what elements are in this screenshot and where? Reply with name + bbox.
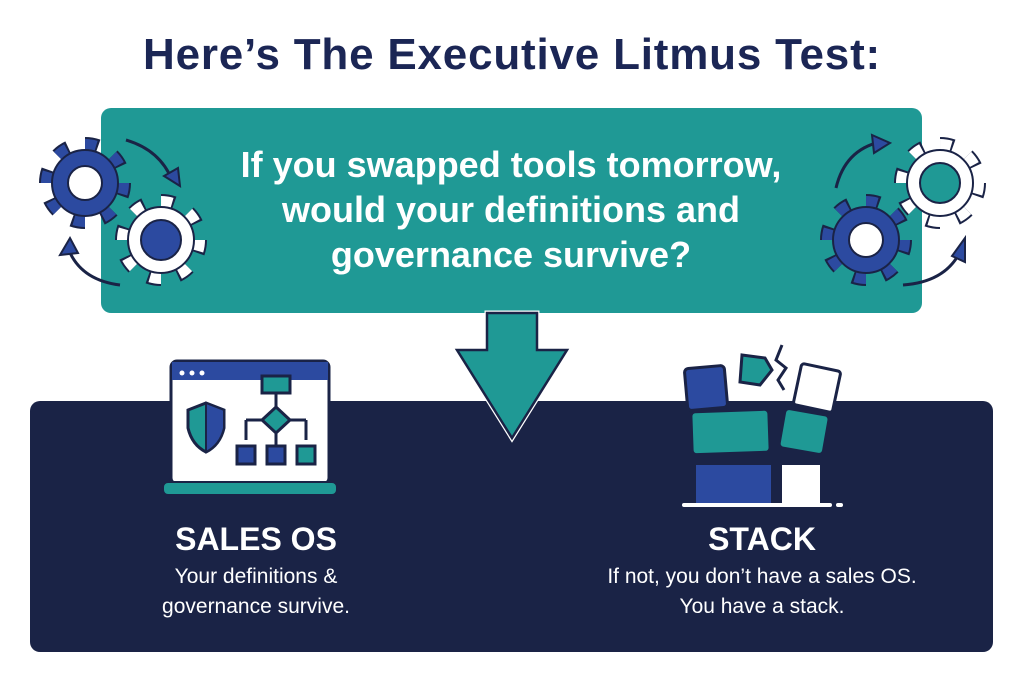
question text: would your definitions and [282,189,740,230]
question text: If you swapped tools tomorrow, [241,144,781,185]
question text [241,144,781,275]
text block: stack [607,521,917,618]
arrow: down [454,310,570,443]
text block: stack: You have a stack. [679,595,844,618]
text block: stack: If not, you don’t have a sales OS. [607,565,917,588]
text block: stack: STACK [708,521,816,557]
icon: broken stack [682,344,843,507]
icon: gears right [820,134,986,286]
title: Here’s The Executive Litmus Test: [143,30,881,79]
text block: sales os [162,521,350,618]
text block: sales os: governance survive. [162,595,350,618]
icon: gears left [39,137,207,286]
icon: laptop [164,360,336,494]
question panel [101,108,922,313]
text block: sales os: Your definitions & [175,565,337,588]
text block: sales os: SALES OS [175,521,337,557]
question text: governance survive? [331,234,691,275]
dark panel [30,401,993,652]
